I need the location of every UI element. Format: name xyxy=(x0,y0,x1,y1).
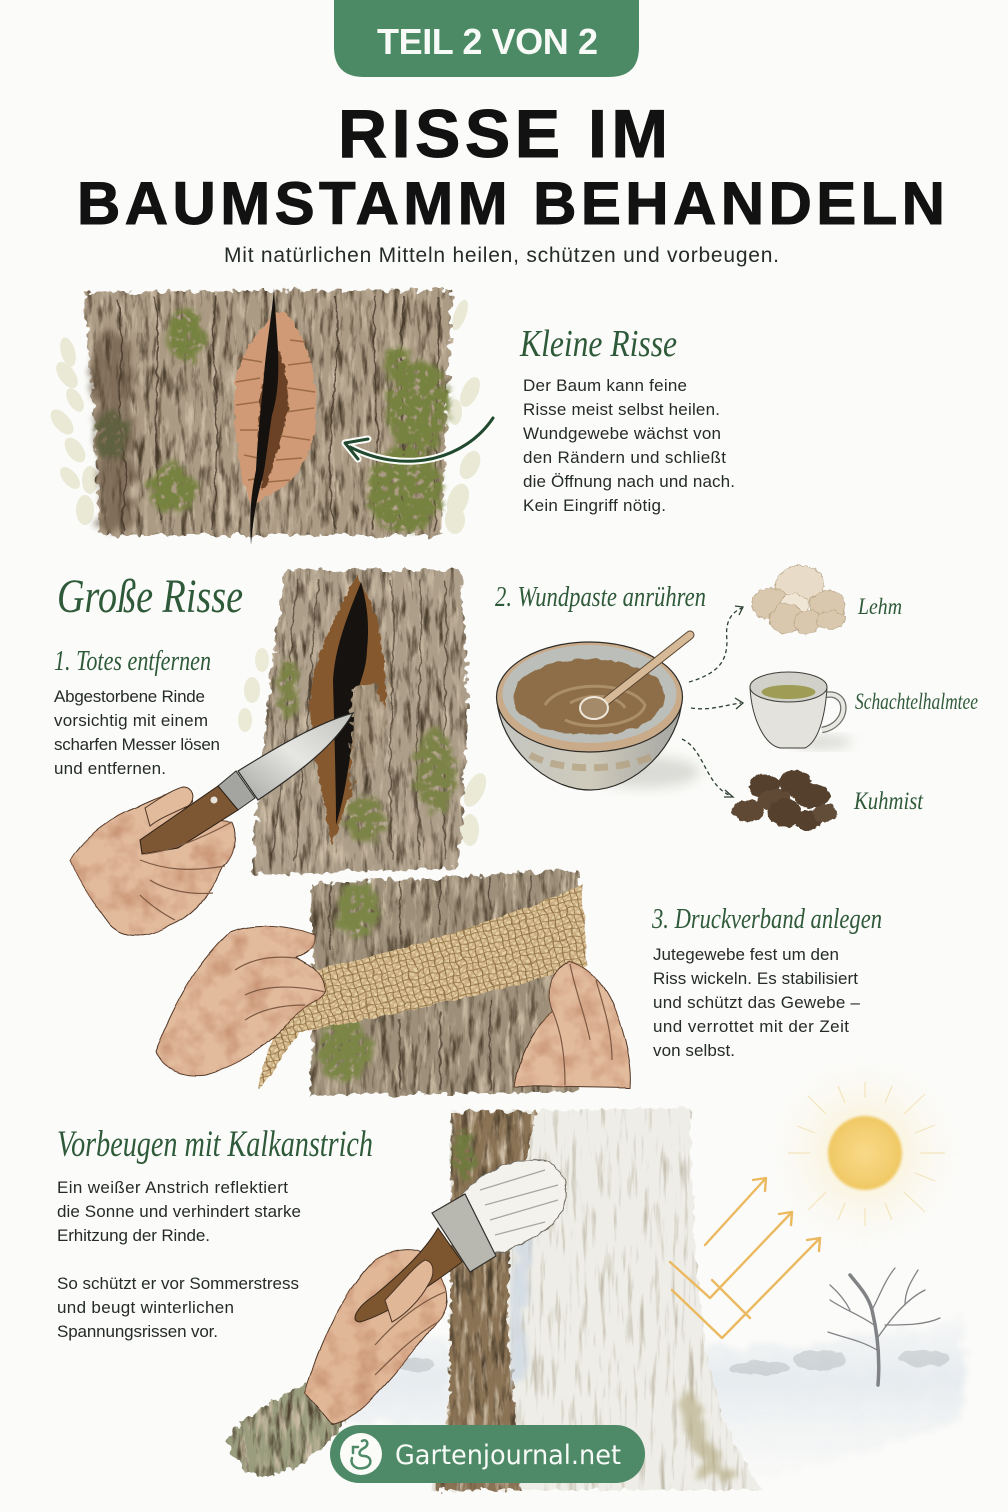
thumb xyxy=(145,787,193,826)
heading: Vorbeugen mit Kalkanstrich: Vorbeugen mit Kalkanstrich xyxy=(57,1124,373,1165)
text: Kleine Risse: Der Baum kann feine xyxy=(523,376,687,395)
moss top left xyxy=(455,1127,475,1183)
bowl shadow xyxy=(590,756,700,788)
panel: whitewashed tree in winter landscape xyxy=(225,1058,965,1490)
bristle strokes xyxy=(480,1170,558,1235)
panel: bowl with wound paste xyxy=(496,635,700,790)
bark furrows xyxy=(118,295,439,530)
trunk bare bark xyxy=(436,1110,535,1490)
title: BAUMSTAMM BEHANDELN xyxy=(77,170,945,237)
badge: Teil 2 von 2: TEIL 2 VON 2 xyxy=(377,21,598,62)
text: Totes entfernen: Abgestorbene Rinde xyxy=(54,687,205,706)
lichen at base xyxy=(680,1380,735,1480)
heading: Große Risse: Große Risse xyxy=(57,570,243,623)
subtitle: Mit natürlichen Mitteln heilen, schützen und vorbeugen. xyxy=(224,244,779,267)
leaves behind the trunk xyxy=(46,298,484,534)
reflected sun arrows xyxy=(670,1178,820,1338)
blue-white paint edge xyxy=(513,1225,530,1380)
bolster xyxy=(218,771,255,810)
ferrule xyxy=(432,1194,496,1272)
dark side of trunk xyxy=(92,333,134,530)
text: Vorbeugen: Erhitzung der Rinde. xyxy=(57,1226,210,1245)
text: Kleine Risse: Kein Eingriff nötig. xyxy=(523,496,666,515)
arrow: to Kuhmist xyxy=(682,739,733,797)
logo xyxy=(340,1433,382,1475)
crack xyxy=(250,288,278,545)
text: Vorbeugen: die Sonne und verhindert starke xyxy=(57,1202,301,1221)
leaves behind trunk xyxy=(238,648,491,846)
cup shadow xyxy=(792,736,852,748)
title: RISSE IM xyxy=(338,96,668,172)
knife xyxy=(140,713,353,854)
text: Druckverband: Riss wickeln. Es stabilisiert xyxy=(653,969,858,988)
text: Totes entfernen: vorsichtig mit einem xyxy=(54,711,208,730)
text: Kleine Risse: die Öffnung nach und nach. xyxy=(523,472,735,491)
heading: 1. Totes entfernen: 1. Totes entfernen xyxy=(54,645,211,677)
snow landscape xyxy=(335,1318,965,1475)
moss patches xyxy=(319,884,380,1082)
bowl body xyxy=(497,698,682,790)
blade xyxy=(238,713,353,800)
text: Totes entfernen: scharfen Messer lösen xyxy=(54,735,220,754)
bristles xyxy=(462,1160,566,1254)
bowl rim xyxy=(496,642,682,752)
tea xyxy=(762,685,816,699)
distant shrubs xyxy=(395,1350,951,1375)
heading: Kleine Risse: Kleine Risse xyxy=(519,323,677,365)
left hand finger lines xyxy=(235,957,325,1020)
handle xyxy=(140,786,238,854)
heading: 3. Druckverband: 3. Druckverband anlegen xyxy=(651,903,882,935)
text: Vorbeugen: So schützt er vor Sommerstress xyxy=(57,1274,299,1293)
trunk bark xyxy=(252,570,468,875)
footer badge: Gartenjournal.net xyxy=(330,1425,645,1483)
inner wound xyxy=(258,345,288,490)
text: Druckverband: und verrottet mit der Zeit xyxy=(653,1017,849,1036)
finger lines xyxy=(375,1292,445,1375)
wound edges xyxy=(234,312,316,510)
cup rim xyxy=(750,672,827,702)
text: Druckverband: Jutegewebe fest um den xyxy=(653,945,839,964)
arrow: to Lehm xyxy=(689,606,743,682)
cup handle xyxy=(822,695,843,730)
wound layers xyxy=(236,340,315,482)
bark flap over crack xyxy=(350,682,388,790)
panel: trunk with big crack and knife xyxy=(70,570,491,936)
thumb xyxy=(385,1260,433,1322)
trunk bark xyxy=(84,290,452,535)
arrow pointing at the crack xyxy=(345,418,493,461)
text: Kleine Risse: Risse meist selbst heilen. xyxy=(523,400,720,419)
tan glaze patches xyxy=(530,755,655,768)
icon: cup of horsetail tea xyxy=(750,672,852,748)
text: Kleine Risse: den Rändern und schließt xyxy=(523,448,726,467)
text: Kleine Risse xyxy=(523,376,735,515)
text: Druckverband xyxy=(653,945,861,1060)
title xyxy=(77,96,945,237)
left hand xyxy=(155,926,325,1076)
panel: kleine Risse illustration xyxy=(46,288,493,545)
site name: Gartenjournal.net xyxy=(395,1440,621,1471)
handle xyxy=(355,1228,462,1322)
cup body xyxy=(750,688,827,748)
right hand finger lines xyxy=(553,964,612,1085)
wound edges xyxy=(310,575,386,845)
text: Vorbeugen: Ein weißer Anstrich reflektiert xyxy=(57,1178,288,1197)
sun glow xyxy=(770,1058,960,1248)
icon: cow manure xyxy=(732,770,837,830)
sleeve xyxy=(225,1376,348,1478)
bare tree xyxy=(828,1268,940,1385)
arrow: to tea xyxy=(691,698,743,709)
text: Vorbeugen: und beugt winterlichen xyxy=(57,1298,234,1317)
bark furrows xyxy=(272,580,446,860)
sun xyxy=(828,1116,902,1190)
crack opening xyxy=(333,582,368,825)
label: Lehm: Lehm xyxy=(857,594,902,619)
spoon xyxy=(580,635,690,719)
icon: clay lumps xyxy=(752,565,846,634)
trunk bark xyxy=(310,870,584,1095)
heading: 2. Wundpaste: 2. Wundpaste anrühren xyxy=(495,581,706,613)
text: Totes entfernen xyxy=(54,687,220,778)
text: Kleine Risse: Wundgewebe wächst von xyxy=(523,424,721,443)
text: Druckverband: von selbst. xyxy=(653,1041,735,1060)
badge: Teil 2 von 2 xyxy=(334,0,639,77)
text: Druckverband: und schützt das Gewebe – xyxy=(653,993,861,1012)
jute band xyxy=(258,885,587,1090)
sun rays xyxy=(788,1082,945,1226)
trunk white xyxy=(432,1108,762,1490)
hand palm xyxy=(70,789,235,936)
paste xyxy=(513,659,665,735)
panel: trunk with jute wrap and hands xyxy=(155,870,630,1095)
hand palm xyxy=(305,1250,447,1425)
moss patches xyxy=(94,307,450,535)
label: Kuhmist: Kuhmist xyxy=(853,788,924,815)
right hand xyxy=(515,962,630,1088)
bark furrows xyxy=(330,875,530,1090)
text: Vorbeugen: Spannungsrissen vor. xyxy=(57,1322,218,1341)
text: Vorbeugen xyxy=(57,1178,301,1341)
brush xyxy=(355,1160,566,1322)
finger lines xyxy=(140,822,232,920)
text: Totes entfernen: und entfernen. xyxy=(54,759,166,778)
moss patches xyxy=(278,658,455,844)
